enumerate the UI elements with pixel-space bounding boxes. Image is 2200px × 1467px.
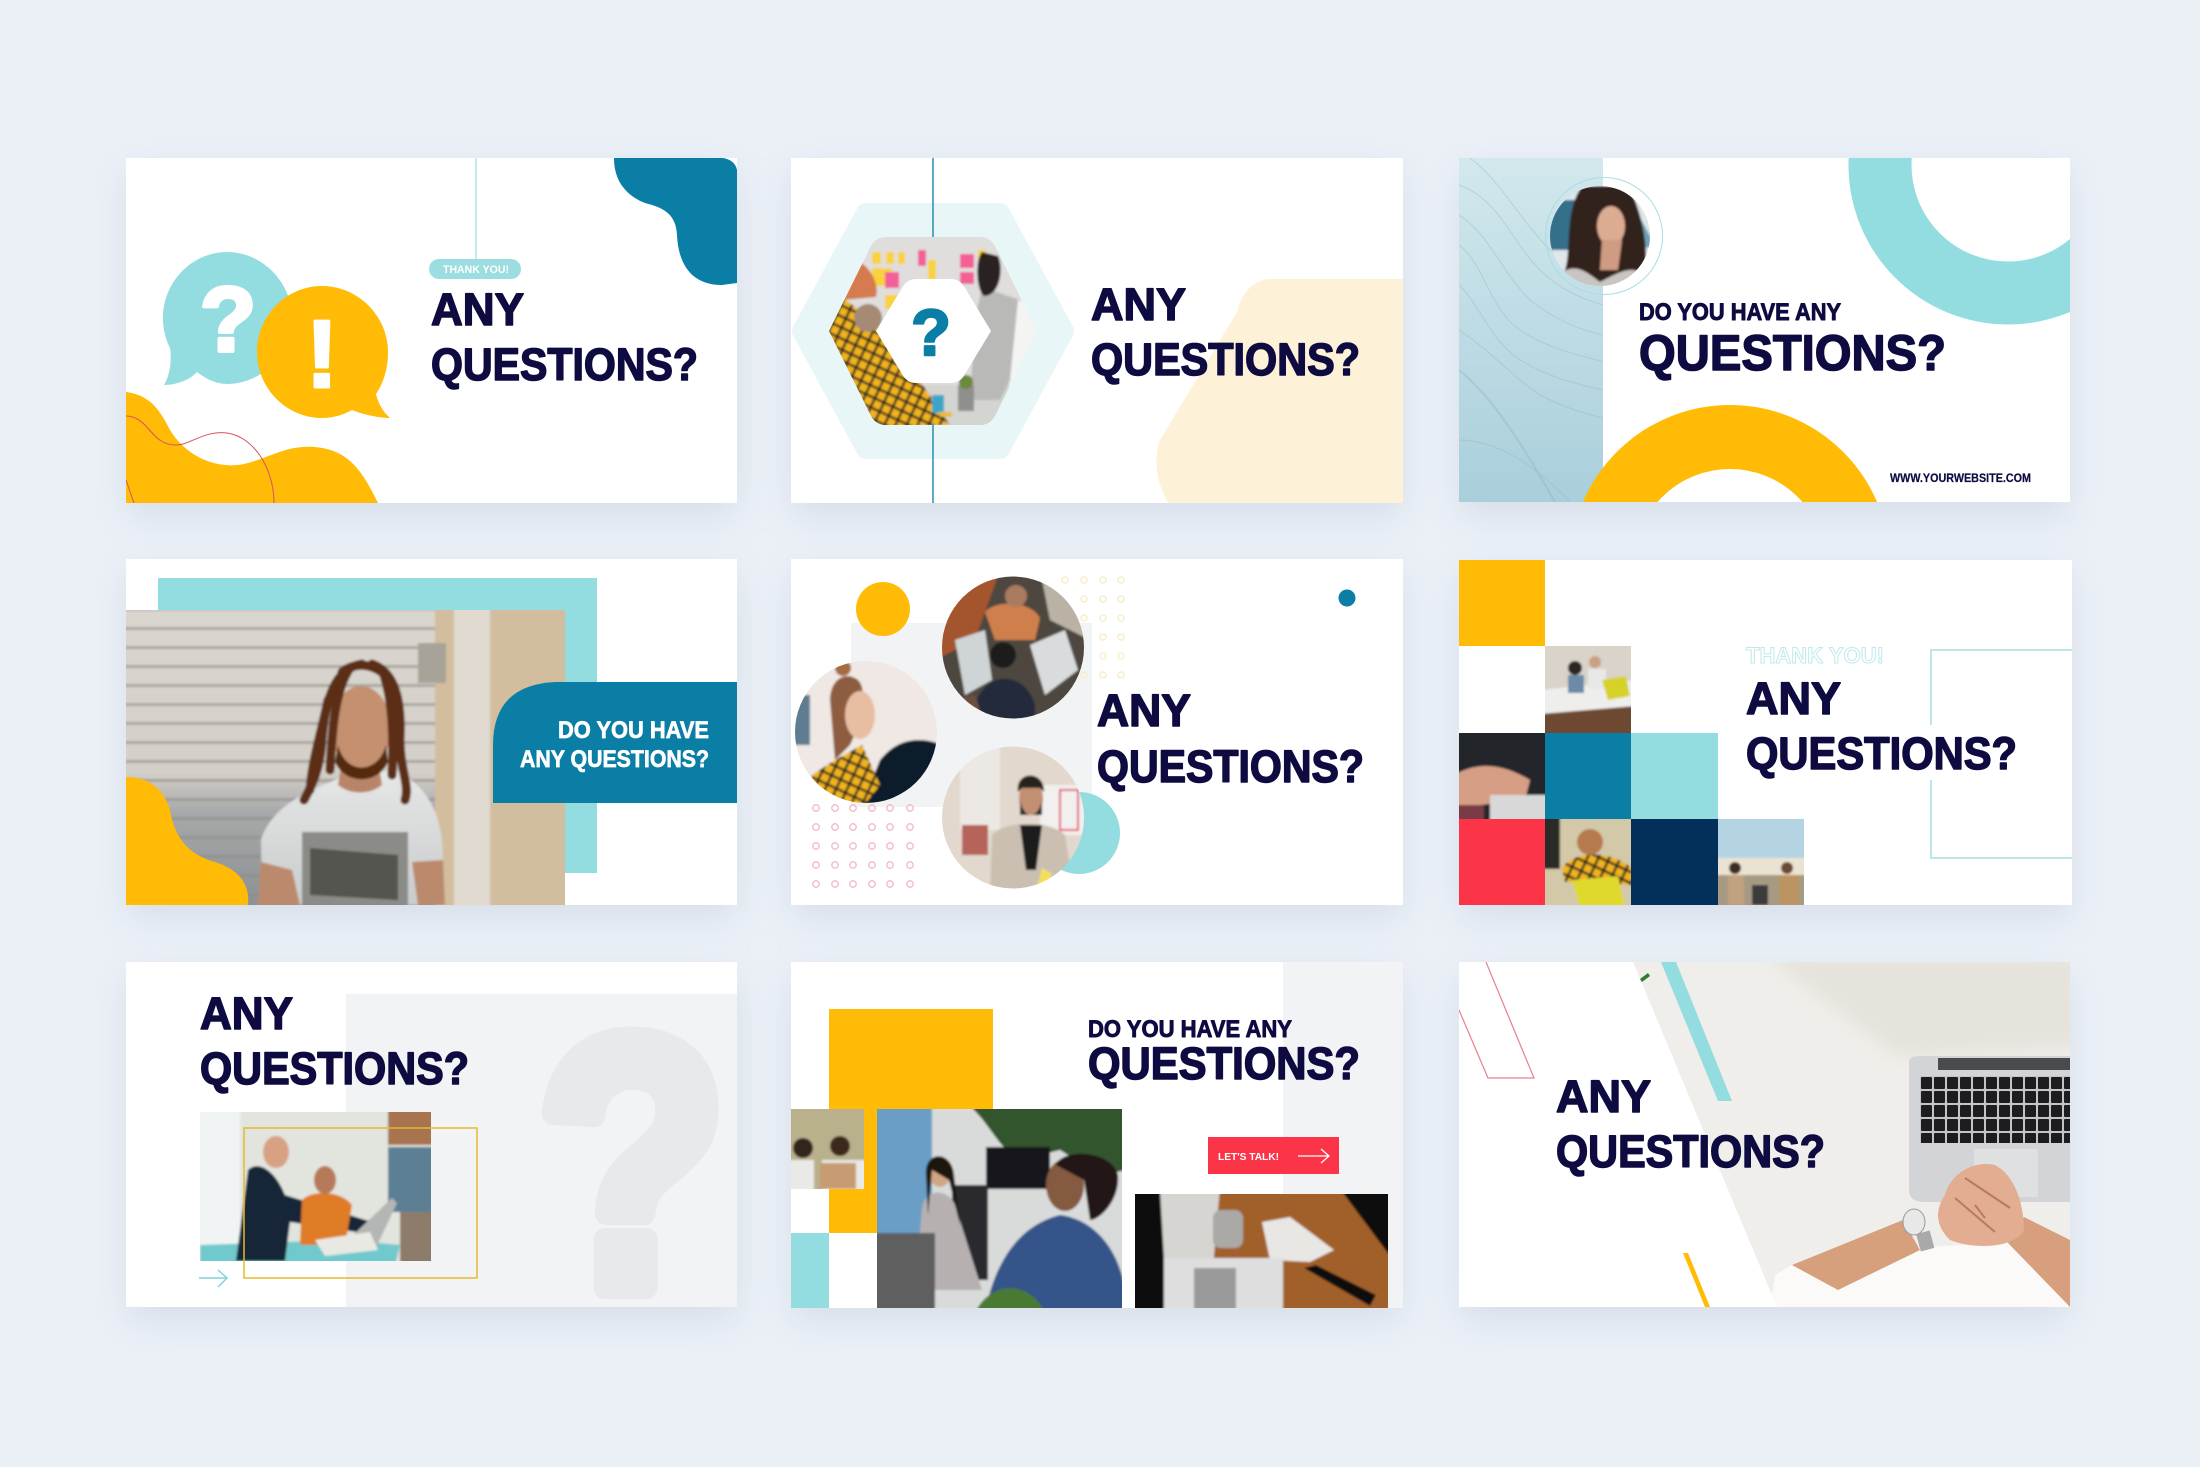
panel: slide 8 photo collage [786, 962, 1403, 1313]
website url: WWW.YOURWEBSITE.COM [1890, 473, 2031, 485]
panel: slide 9 laptop desk [1459, 955, 2080, 1307]
title: QUESTIONS? [1556, 1126, 1825, 1177]
pink dot grid [813, 805, 913, 887]
call to action button: LET'S TALK! [1218, 1152, 1279, 1163]
yellow block [829, 1009, 993, 1233]
gray block [851, 623, 1092, 807]
title: ANY [431, 284, 524, 335]
photo: man with dreadlocks [120, 604, 570, 910]
yellow outline frame [244, 1128, 477, 1278]
title: QUESTIONS? [1746, 728, 2017, 779]
title: DO YOU HAVE ANY [1639, 299, 1841, 326]
title [1091, 279, 1360, 385]
title: QUESTIONS? [431, 339, 698, 390]
arrow [199, 1270, 227, 1287]
title: QUESTIONS? [1097, 741, 1364, 792]
teal blob top right [614, 158, 737, 285]
title [1088, 1016, 1360, 1089]
teal tile [1631, 733, 1718, 819]
blue dot [1338, 590, 1356, 606]
title [1639, 299, 1946, 381]
photo circle: laptops team [942, 576, 1084, 718]
blue tile [1545, 733, 1631, 819]
photo tile: hands [1459, 733, 1545, 819]
vertical line [932, 158, 934, 503]
title: DO YOU HAVE ANY [1088, 1016, 1292, 1043]
photo: two men with laptop [791, 1109, 864, 1189]
title: QUESTIONS? [200, 1043, 469, 1094]
navy tile [1631, 819, 1718, 905]
title: ANY [1556, 1071, 1651, 1122]
yellow blob bottom left [126, 392, 378, 503]
photo: woman portrait [1550, 186, 1650, 286]
panel: slide 6 colour grid [1454, 560, 2072, 910]
title: ANY [1091, 279, 1186, 330]
title: QUESTIONS? [1088, 1038, 1360, 1089]
photo: wooden desk with laptop [1130, 1189, 1393, 1313]
yellow tile [1459, 560, 1545, 646]
textured blue panel [1459, 158, 1603, 502]
outline frame [1931, 650, 2072, 858]
panel: slide 2 hexagon [791, 158, 1403, 503]
outlined thank you: THANK YOU! [1746, 643, 1884, 668]
blue label panel: DO YOU HAVE [558, 717, 709, 744]
title [1097, 685, 1364, 792]
photo: hands on laptop [1459, 955, 2080, 1307]
teal frame block [158, 578, 597, 873]
icon: yellow exclamation bubble: ! [306, 301, 338, 408]
big watermark question mark: ? [538, 966, 726, 1363]
white inner hexagon [876, 279, 991, 383]
gray block [346, 994, 737, 1307]
title: QUESTIONS? [1091, 334, 1360, 385]
photo circle: woman in plaid [795, 661, 937, 803]
panel: slide 3 portrait with rings [1459, 158, 2070, 502]
photo circle: man in blazer [942, 746, 1084, 888]
title [431, 284, 698, 390]
teal strip [1661, 962, 1732, 1101]
pale yellow dot grid [1062, 577, 1124, 678]
yellow blob [126, 777, 248, 905]
panel: slide 1 speech bubbles [126, 158, 737, 503]
yellow circle [856, 582, 910, 636]
panel: slide 4 portrait man [120, 559, 737, 910]
yellow ring [1583, 405, 1877, 502]
red squiggle line [126, 416, 274, 503]
vertical line [475, 158, 477, 260]
circle outline [1546, 178, 1662, 294]
blue label panel [493, 682, 737, 803]
yellow strip [1683, 1253, 1710, 1307]
photo: two colleagues at monitors [872, 1104, 1127, 1313]
photo: team at sticky note wall [829, 237, 1036, 425]
badge: thank you [429, 259, 521, 279]
panel: slide 5 three circles [790, 559, 1403, 905]
red outline shape [1459, 962, 1534, 1078]
photo tile: meeting table [1545, 646, 1631, 733]
blue label panel: ANY QUESTIONS? [520, 746, 709, 773]
title: QUESTIONS? [1639, 325, 1946, 381]
photo tile: terrace chat [1718, 819, 1804, 905]
badge: thank you: THANK YOU! [443, 264, 509, 276]
red tile [1459, 819, 1545, 905]
icon: question mark: ? [911, 296, 951, 369]
icon: teal question bubble: ? [200, 269, 256, 371]
title: ANY [1097, 685, 1191, 736]
card shadows [128, 172, 2070, 1320]
white gap block [791, 1189, 829, 1233]
panel: slide 7 big question mark [126, 962, 737, 1307]
photo tile: woman with yellow laptop [1545, 819, 1631, 905]
outer pale hexagon [802, 213, 1064, 449]
gray column [1283, 962, 1403, 1308]
photo: handshake at desk [200, 1112, 431, 1261]
title [1556, 1071, 1825, 1177]
title: ANY [200, 988, 293, 1039]
icon: yellow exclamation bubble [257, 286, 390, 418]
cream shape [1156, 279, 1403, 503]
call to action button [1208, 1137, 1339, 1174]
green accent [1640, 973, 1650, 982]
title [200, 988, 469, 1094]
teal ring [1848, 158, 2070, 324]
title: ANY [1746, 673, 1841, 724]
white diagonal panel [1459, 962, 1777, 1307]
teal block [791, 1233, 829, 1308]
title [1746, 673, 2017, 779]
icon: teal question bubble [163, 252, 292, 385]
teal circle [1038, 792, 1120, 874]
